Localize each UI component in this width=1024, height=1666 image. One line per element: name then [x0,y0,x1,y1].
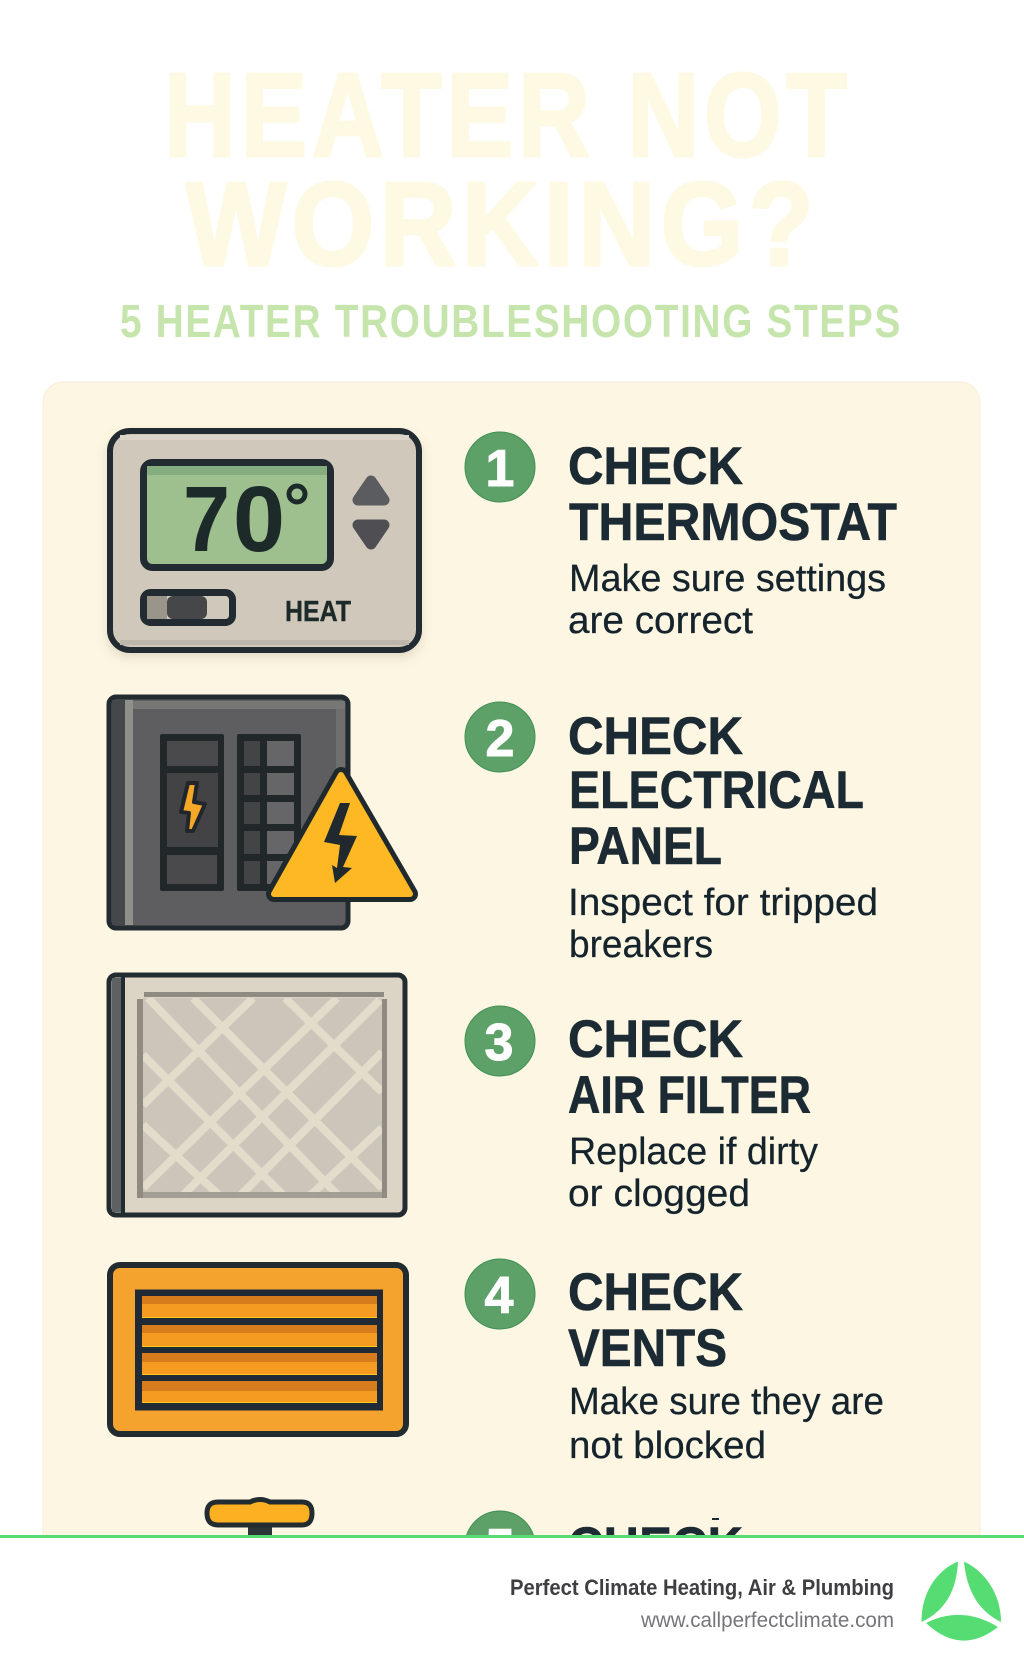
step 2: ELECTRICAL [569,761,864,820]
title [164,49,852,291]
step 4: not blocked [569,1425,766,1467]
footer website: www.callperfectclimate.com [640,1609,894,1632]
icon: small bolt [181,783,205,831]
icon: electrical panel with warning [109,697,410,928]
step 3: Replace if dirty [569,1131,818,1173]
step 2: PANEL [569,817,722,876]
step 2: Inspect for tripped [568,882,878,924]
step 4: VENTS [568,1319,727,1378]
step 4: CHECK [568,1263,743,1322]
step 1 [465,432,897,642]
step 2: CHECK [568,707,743,766]
step 3: or clogged [568,1173,750,1215]
title: WORKING? [186,158,819,291]
icon: thermostat: HEAT [285,596,351,628]
icon: vent [110,1265,406,1434]
logo [921,1562,1001,1641]
step 1: CHECK [568,437,743,496]
step 4 [465,1259,884,1467]
step 3: AIR FILTER [568,1066,811,1125]
step 5 (cut off by footer): 5 [486,1519,514,1577]
step 3: CHECK [568,1010,743,1069]
icon: air filter [109,975,405,1215]
step 3 [465,1006,818,1215]
step 5 (cut off by footer): CHECK [568,1517,743,1576]
footer [0,1535,1024,1666]
step 1: are correct [568,600,753,642]
panel: steps background [43,382,980,1582]
step 1: THERMOSTAT [569,493,897,552]
step 2 [465,702,878,966]
icon: thermostat [110,431,419,650]
thermostat reading [183,467,285,571]
subtitle: 5 HEATER TROUBLESHOOTING STEPS [120,295,902,347]
step 5 (cut off by footer) [465,1511,743,1581]
title: HEATER NOT [164,49,852,182]
filter lattice [143,998,382,1208]
icon: warning triangle [274,775,410,894]
step 2: 2 [486,710,514,768]
step 4: Make sure they are [569,1381,884,1423]
thermostat reading: 0 [233,467,285,571]
thermostat reading: 7 [183,467,230,571]
step 1: Make sure settings [569,558,886,600]
step 2: breakers [569,924,713,966]
step 3: 3 [485,1014,513,1072]
icon: shut-off valve (cut off by footer) [207,1500,312,1550]
footer company name: Perfect Climate Heating, Air & Plumbing [510,1575,894,1600]
step 1: 1 [486,440,514,498]
step 4: 4 [485,1267,514,1325]
